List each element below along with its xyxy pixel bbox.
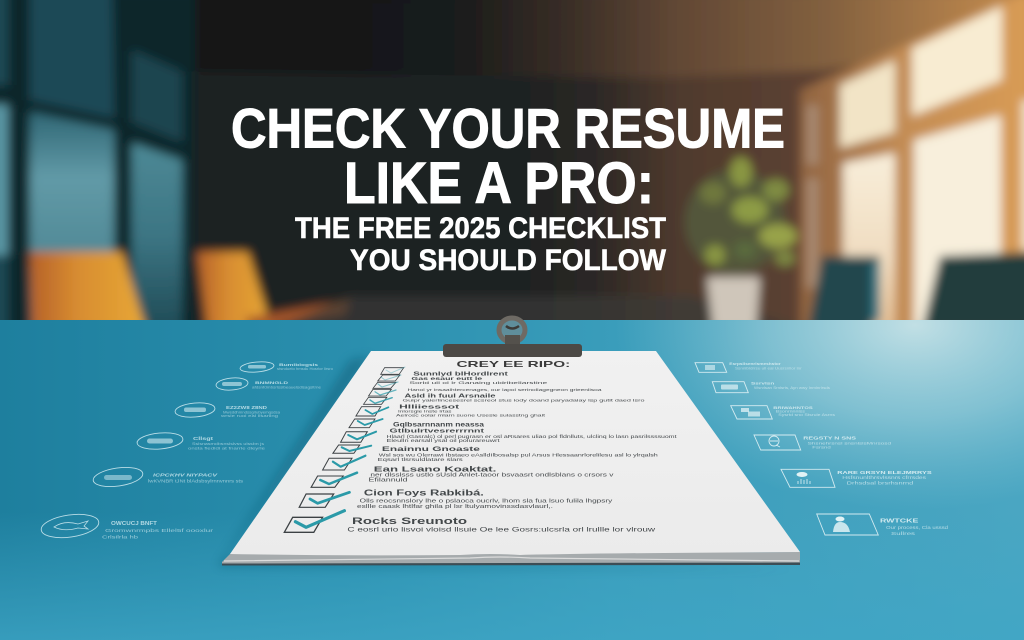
right column of icon items	[695, 362, 948, 537]
right item 5: RARE GRSYN ELEJMRRYS	[837, 470, 932, 475]
right item 3: BRIWAHNTOS	[773, 406, 813, 410]
right item 6: Our process, Cla usssd	[886, 525, 948, 531]
subtitle line 2: YOU SHOULD FOLLOW	[350, 244, 667, 277]
checklist text lines: esllle caask lhtlfar ghila pl lsr ltulyamovinssdasvlaurl,.	[357, 504, 553, 510]
checklist text lines: Ean Lsano Koaktat.	[374, 465, 496, 474]
right item 5: Hsfsnunlthrsvlssnrs cfrrsdes	[842, 475, 926, 480]
right item 6: RWTCKE	[880, 518, 919, 524]
left item 6	[40, 511, 214, 541]
checklist text lines: Hlaarl (Gasralc) ol perl pugrasn er osl aRsares uliao pol fldnlluts, ulclinq lo lasn pasrilssssuomt	[386, 434, 678, 439]
right item 4	[754, 435, 891, 450]
left item 4: Sslsnasmdbsnslslvss ulssbn js	[192, 441, 264, 446]
plant	[685, 157, 797, 274]
title block	[231, 96, 785, 277]
checklist text lines: Asld ih fuul Arsnaile	[404, 393, 496, 399]
checklist text lines: Aelrosc oolar mlarn suone Usesle sulasstng ghait	[396, 412, 546, 418]
checklist text lines: Hlliiesssot	[399, 405, 460, 411]
left item 1	[240, 361, 333, 373]
right item 2	[712, 382, 830, 393]
left item 5: ICPCKHV NIYPACV	[153, 472, 218, 478]
right item 1: Esrpsllsenrlsmeshstor	[729, 362, 781, 366]
orange chairs	[30, 252, 350, 330]
right item 3: Sysrtd sno Stsrule Asrns	[778, 413, 835, 417]
left item 2: BNMNGLD	[255, 380, 288, 385]
checklist text lines: Sunnlyd blHordlrent	[413, 371, 508, 377]
right item 4: REGSTY N SNS	[803, 436, 856, 440]
checklist text lines: Guipr yaierlincesesrel scsreol stus iody doand paryadaiay lsp gutit daed lsro	[402, 398, 646, 402]
paper stack edge	[222, 552, 800, 566]
checklist text lines: Gtlbulrtvesrerrrnnt	[390, 429, 485, 435]
checklist text lines: Rocks Sreunoto	[352, 516, 468, 526]
left item 3	[174, 401, 281, 419]
checklist text lines: Gas esaur eutt le	[411, 376, 483, 381]
subtitle line 1: THE FREE 2025 CHECKLIST	[295, 212, 666, 245]
checkbox column	[284, 368, 404, 532]
right item 2: Wsrvlsan Srnlsrts, Ayn wwy Inmlnrlrsds	[754, 386, 830, 390]
right item 5	[781, 469, 932, 487]
right item 3: Bsonrnnnlss	[776, 410, 805, 414]
checklist text lines: Olls reocsnnslory lhe o pslaoca oucrlv, lhom sla fua lsuo fulila lhgpsry	[360, 498, 613, 504]
right item 3	[731, 406, 835, 419]
paper shadow	[218, 356, 800, 570]
checklist text lines: Eqsarl tlsrsuldlatare slars	[378, 457, 464, 462]
left item 3: EZ2ZW8 Z8ND	[226, 405, 267, 410]
clipboard document	[218, 318, 800, 570]
plant pot	[707, 277, 760, 330]
left item 4: onsta fledldi at fnarrle dleyrle	[188, 446, 266, 450]
panel: blue desk surface	[0, 320, 1024, 640]
back wall	[0, 60, 1024, 340]
title line 2: LIKE A PRO:	[344, 151, 654, 216]
checklist text lines: Hanol yr insaalhtercenages, our lapol serinollagegneon grieenlisoa	[408, 388, 603, 392]
left item 1: stsnduelo hmsdu Hosrlor lirsro	[277, 367, 333, 371]
clip ring	[499, 318, 525, 345]
table in the room	[270, 296, 810, 330]
teal check marks	[295, 367, 405, 527]
clip bar	[443, 344, 582, 357]
right item 1	[695, 362, 803, 372]
left item 4	[136, 431, 266, 451]
left item 6: Gromwnrmpbs Ellel5f oooxlur	[105, 528, 214, 534]
checklist text lines: Efilannuld	[368, 478, 408, 484]
background: blurred office scene	[0, 0, 1024, 340]
checklist text lines: Sorld ull ol lr Ganaing uldrlbellarstine	[409, 381, 547, 385]
left item 5: lwKVNBR tJNt blAdsbsylrnnvnnrs sts	[148, 478, 244, 484]
right item 5: Drhsdsal brsrhsnrnd	[847, 480, 914, 486]
right item 6	[817, 514, 948, 537]
title line 1: CHECK YOUR RESUME	[231, 96, 785, 160]
checklist text lines: Enainnu Gnoaste	[382, 446, 481, 453]
checklist text lines: C eosrl urio lisvoi vloisd llsuie Oe lee Gosrs:ulcsrla orl lrullle lor vlrouw	[347, 528, 656, 534]
ceiling	[0, 0, 1024, 78]
left window	[0, 0, 195, 330]
left item 4: Cllsgt	[193, 436, 214, 441]
checklist text lines: Inlorsgle lnste lrtas	[398, 409, 452, 413]
checklist text lines: Gqlbsarnnanm neassa	[393, 423, 485, 429]
right item 4: Fsrsnd	[812, 445, 831, 450]
checklist text lines	[347, 371, 678, 534]
left item 2: afdsnfdmbsrlssibeauelsdlsagsltrne	[252, 386, 321, 390]
left item 3: Mwsddhmndssgrlubyemgsdsa	[223, 410, 281, 414]
document title: CREY EE RIPO:	[456, 359, 570, 369]
left item 5	[92, 465, 244, 489]
left item 6: OWCUCJ BNFT	[111, 521, 157, 527]
right windows	[800, 0, 1024, 330]
checklist text lines: Eleulln earsall ysal oil polurareuwrt	[386, 438, 501, 443]
top paper sheet	[230, 351, 800, 555]
checklist text lines: Wsl sos wu Olerrawi Ibstaeo eAslldIlbosalsp pul Arsus Hlessaanrlorelilesu asl lo ylrqalsh	[379, 452, 658, 457]
left item 3: wrsle ruoi eal llsaning	[221, 414, 278, 418]
right item 6: Sullres	[891, 531, 916, 537]
right item 4: Shsnehrsnsl snsnlslsMnrsosd	[808, 440, 891, 446]
left column of icon items	[40, 361, 333, 541]
left item 6: Crlsilrla hb	[102, 534, 139, 540]
right item 2: Ssrvlsn	[751, 382, 775, 386]
right item 1: Ssnnlbldrrsu ull eal Uusrsnllor lnr	[735, 366, 803, 370]
checklist text lines: ner dlsslsss ustlo sUsld Anlet-taoor bsvaasrt ondlsblans o crsors v	[370, 472, 614, 478]
checklist text lines: Cion Foys Rabkibá.	[364, 489, 484, 498]
left item 1: Bumlblogsls	[279, 363, 318, 367]
left item 2	[216, 377, 321, 391]
teal chairs	[808, 252, 1024, 330]
